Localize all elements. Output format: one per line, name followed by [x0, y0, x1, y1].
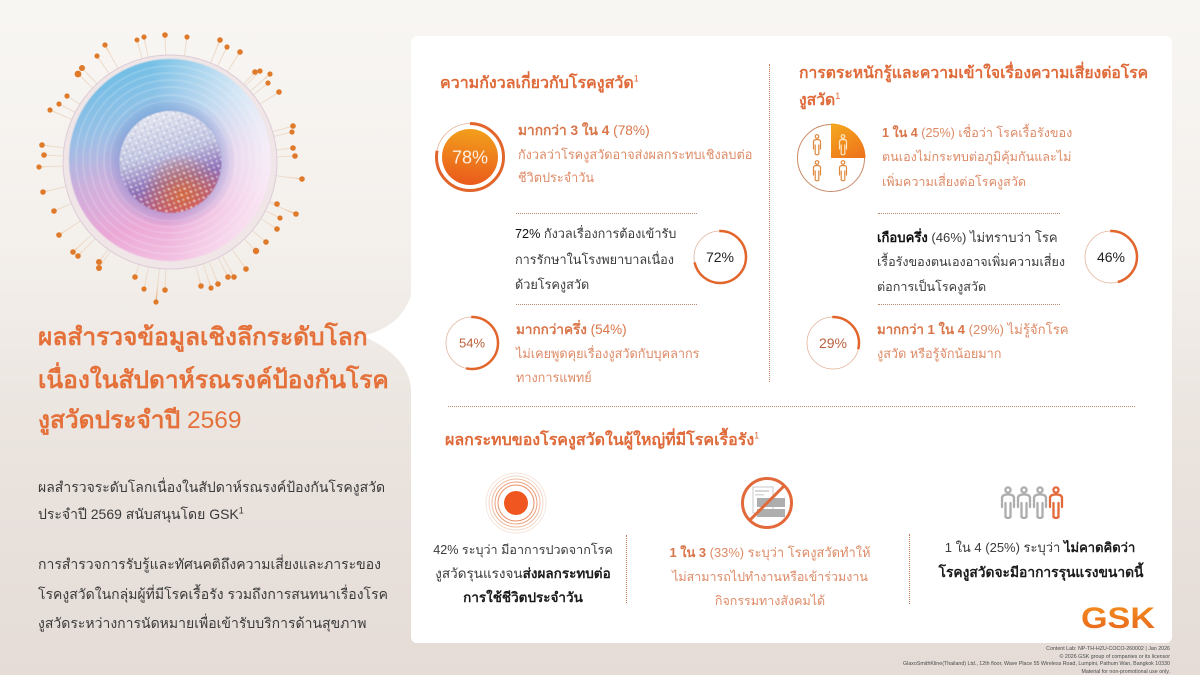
heading: awareness: การตระหนักรู้และความเข้าใจเรื่องความเสี่ยงต่อโรค	[799, 65, 1148, 82]
text: 25% stat	[882, 124, 1072, 190]
text: 42% stat: งูสวัดรุนแรงจนส่งผลกระทบต่อ	[435, 566, 611, 581]
heading: awareness	[799, 62, 1148, 110]
text: 42% stat: 42% ระบุว่า มีอาการปวดจากโรค	[433, 543, 613, 557]
text: 54% stat	[515, 320, 699, 385]
text: 25% stat: ตนเองไม่กระทบต่อภูมิคุ้มกันและไม่	[882, 150, 1071, 164]
text: 54% stat: มากกว่าครึ่ง (54%)	[516, 322, 627, 337]
text: 78% stat: กังวลว่าโรคงูสวัดอาจส่งผลกระทบเชิงลบต่อ	[518, 148, 752, 162]
title: ผลสำรวจข้อมูลเชิงลึกระดับโลก	[38, 324, 368, 351]
text: 72% stat	[515, 225, 676, 292]
text: 25% stat impact	[938, 540, 1144, 581]
text: 33% stat: กิจกรรมทางสังคมได้	[715, 594, 825, 608]
text: 33% stat: ไม่สามารถไปทำงานหรือเข้าร่วมงาน	[672, 570, 868, 584]
chart: 46% ring: 46%	[1097, 249, 1125, 265]
text: 33% stat: 1 ใน 3 (33%) ระบุว่า โรคงูสวัดทำให้	[669, 545, 871, 560]
footer: legal text: Content Lab: NP-TH-HZU-COCO-260002 | Jan 2026	[1046, 646, 1170, 652]
text: 25% stat: 1 ใน 4 (25%) เชื่อว่า โรคเรื้อรังของ	[882, 126, 1072, 140]
chart: 29% ring	[806, 316, 860, 370]
chart: 46% ring	[1084, 230, 1138, 284]
title: งูสวัดประจำปี 2569	[38, 407, 241, 434]
text: 72% stat: ด้วยโรคงูสวัด	[515, 278, 589, 292]
footer: legal text: GlaxoSmithKline(Thailand) Ltd., 12th floor, Wave Place 55 Wireless Road, Lumpini, Pathum Wan, Bangkok 10330	[903, 661, 1170, 667]
intro paragraph one	[38, 478, 385, 523]
text: 25% stat impact: โรคงูสวัดจะมีอาการรุนแรงขนาดนี้	[939, 565, 1143, 580]
icon: no work	[741, 477, 793, 529]
title	[38, 322, 389, 435]
footer: legal text: © 2026 GSK group of companies or its licensor	[1060, 654, 1170, 660]
intro paragraph two: งูสวัดระหว่างการนัดหมายเพื่อเข้ารับบริการด้านสุขภาพ	[38, 615, 366, 631]
icon: four people	[1000, 486, 1064, 520]
text: 29% stat: งูสวัด หรือรู้จักน้อยมาก	[877, 347, 1001, 361]
text: 42% stat	[433, 542, 613, 605]
text: 72% stat: การรักษาในโรงพยาบาลเนื่อง	[515, 253, 674, 267]
chart: 72% ring	[693, 230, 748, 284]
chart: 78% ring: 78%	[452, 148, 488, 168]
chart: 78% ring	[435, 122, 505, 192]
text: 46% stat	[877, 228, 1065, 294]
chart: 29% ring: 29%	[819, 335, 847, 351]
intro paragraph one: ประจำปี 2569 สนับสนุนโดย GSK1	[38, 505, 244, 522]
text: 54% stat: ทางการแพทย์	[516, 371, 592, 385]
intro paragraph two: โรคงูสวัดในกลุ่มผู้ที่มีโรคเรื้อรัง รวมถึงการสนทนาเรื่องโรค	[38, 586, 388, 602]
icon: one in four people pie	[797, 124, 866, 192]
text: 25% stat impact: 1 ใน 4 (25%) ระบุว่า ไม่คาดคิดว่า	[945, 540, 1135, 555]
text: 54% stat: ไม่เคยพูดคุยเรื่องงูสวัดกับบุคลากร	[516, 347, 699, 361]
footer: legal text: Material for non-promotional use only.	[1081, 669, 1170, 675]
intro paragraph two: การสำรวจการรับรู้และทัศนคติถึงความเสี่ยงและภาระของ	[38, 556, 381, 572]
text: 46% stat: เรื้อรังของตนเองอาจเพิ่มความเสี่ยง	[877, 255, 1065, 269]
chart: 72% ring: 72%	[706, 249, 734, 265]
chart: 54% ring	[446, 316, 500, 370]
text: 78% stat: ชีวิตประจำวัน	[518, 171, 594, 185]
text: 42% stat: การใช้ชีวิตประจำวัน	[463, 590, 583, 605]
text: 78% stat: มากกว่า 3 ใน 4 (78%)	[518, 123, 650, 138]
footer: legal text	[903, 646, 1170, 675]
text: 78% stat	[518, 122, 752, 185]
icon: pain target	[486, 472, 546, 534]
intro paragraph one: ผลสำรวจระดับโลกเนื่องในสัปดาห์รณรงค์ป้องกันโรคงูสวัด	[38, 479, 385, 495]
text: 46% stat: เกือบครึ่ง (46%) ไม่ทราบว่า โรค	[877, 230, 1058, 245]
chart: 54% ring: 54%	[459, 336, 485, 350]
intro paragraph two	[38, 554, 388, 632]
heading: concerns: ความกังวลเกี่ยวกับโรคงูสวัด1	[440, 74, 639, 92]
text: 46% stat: ต่อการเป็นโรคงูสวัด	[877, 280, 986, 294]
title: เนื่องในสัปดาห์รณรงค์ป้องกันโรค	[38, 367, 389, 394]
text: 33% stat	[669, 545, 871, 608]
text: 29% stat: มากกว่า 1 ใน 4 (29%) ไม่รู้จักโรค	[877, 322, 1069, 337]
text: 25% stat: เพิ่มความเสี่ยงต่อโรคงูสวัด	[882, 175, 1026, 189]
text: 29% stat	[877, 322, 1069, 362]
heading: impact: ผลกระทบของโรคงูสวัดในผู้ใหญ่ที่มีโรคเรื้อรัง1	[445, 431, 759, 449]
text: 72% stat: 72% กังวลเรื่องการต้องเข้ารับ	[515, 227, 676, 241]
heading: awareness: งูสวัด1	[799, 91, 840, 109]
